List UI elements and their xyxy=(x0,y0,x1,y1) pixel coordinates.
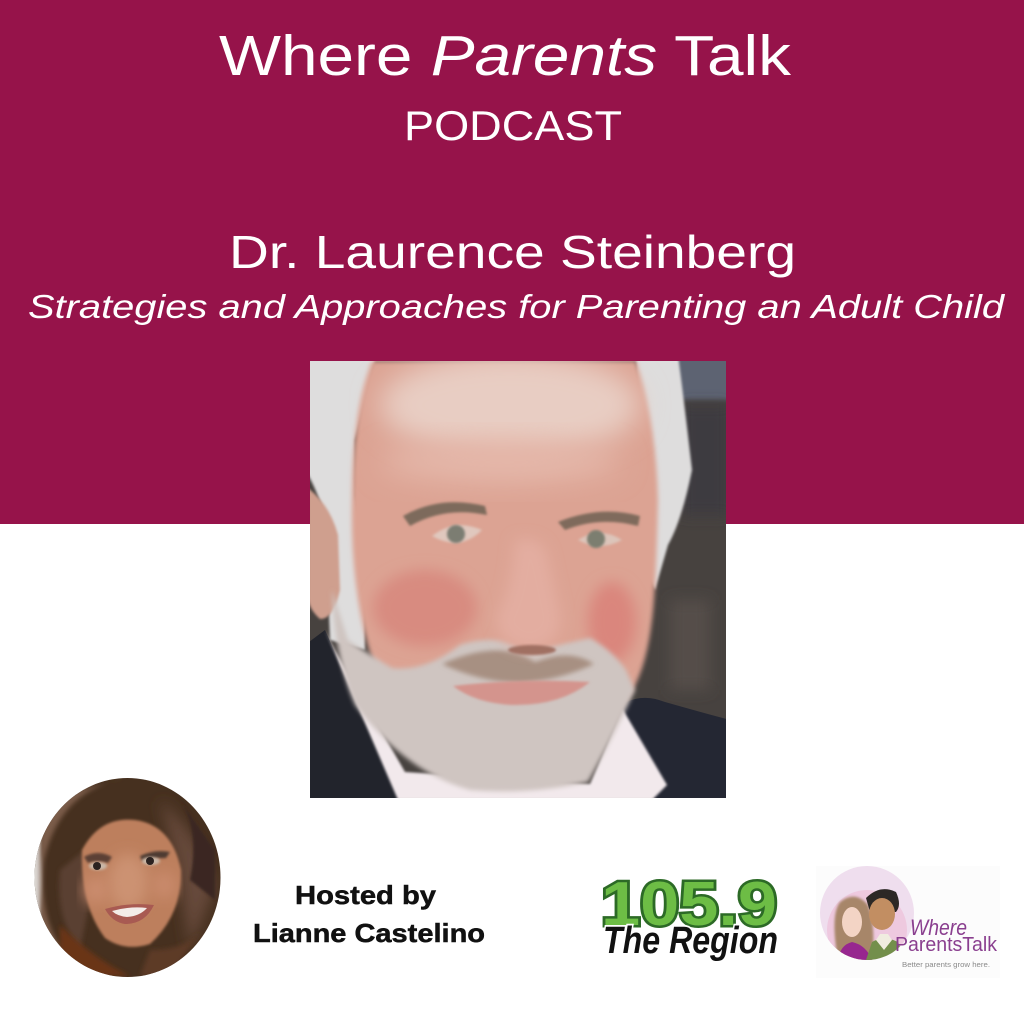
man xyxy=(866,889,899,912)
logo: Where Parents Talk xyxy=(820,866,997,968)
background banner xyxy=(0,0,1024,524)
logo: 105.9 The Region: 105.9 xyxy=(601,870,777,939)
title: Where Parents Talk: Where Parents Talk xyxy=(219,24,792,88)
host portrait xyxy=(34,778,220,977)
lips xyxy=(453,681,590,705)
cheeks xyxy=(373,570,477,646)
guest photo illustration xyxy=(305,340,740,800)
logo: Where Parents Talk: Where xyxy=(910,915,967,940)
logo: 105.9 The Region: The Region xyxy=(603,920,778,962)
eyes xyxy=(432,525,482,543)
forehead highlight xyxy=(380,353,640,457)
host credit: Lianne Castelino xyxy=(253,918,485,948)
guest name: Dr. Laurence Steinberg xyxy=(229,226,796,278)
shirt collar xyxy=(325,630,667,800)
host face xyxy=(82,820,181,947)
jacket xyxy=(305,630,400,800)
subtitle: PODCAST: PODCAST xyxy=(404,102,622,149)
ear xyxy=(308,488,340,619)
episode title: Strategies and Approaches for Parenting an Adult Child xyxy=(28,288,1006,325)
logo: Where Parents Talk: Better parents grow here. xyxy=(902,960,990,969)
host credit: Hosted by xyxy=(295,880,437,910)
logo: 105.9 The Region xyxy=(601,870,778,962)
host credit xyxy=(253,880,485,948)
beard xyxy=(332,590,635,791)
face xyxy=(349,361,660,699)
brows xyxy=(403,502,487,526)
logo: Where Parents Talk: ParentsTalk xyxy=(895,934,998,956)
mustache shadow xyxy=(442,650,594,683)
nose xyxy=(500,542,557,644)
host smile xyxy=(105,904,154,924)
woman xyxy=(834,897,873,960)
white hair xyxy=(305,355,692,650)
